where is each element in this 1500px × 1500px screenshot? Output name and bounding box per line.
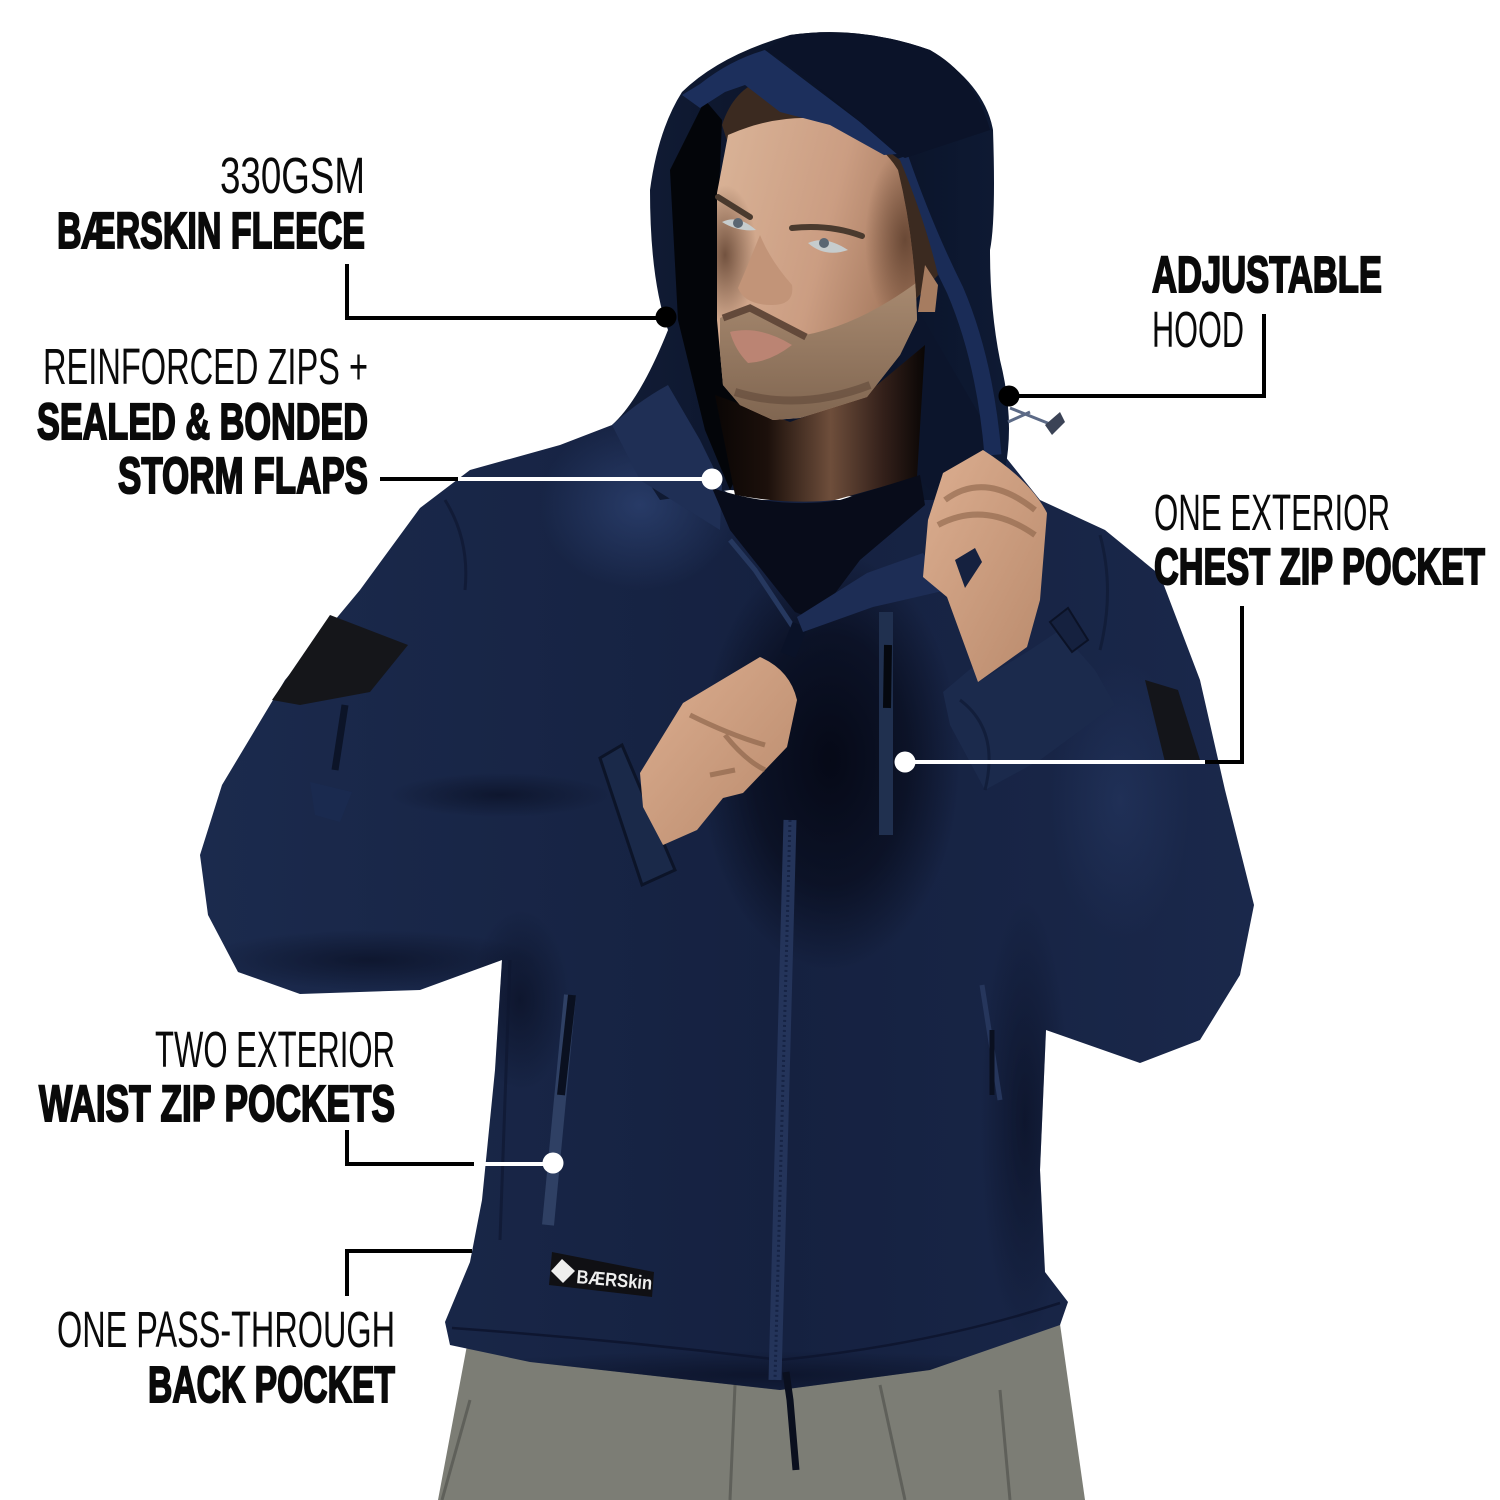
ear (918, 265, 938, 312)
sleeve cuff left (600, 745, 675, 885)
moustache and lips (723, 308, 806, 337)
logo patch (549, 1252, 654, 1297)
callout: adjustable hood: ADJUSTABLE (1152, 246, 1382, 303)
callout: chest zip pocket (894, 484, 1485, 772)
callout: 330gsm baerskin fleece: BÆRSKIN FLEECE (57, 202, 365, 259)
hair (722, 78, 938, 300)
hood peak over forehead (682, 50, 897, 155)
callout: waist zip pockets: TWO EXTERIOR (155, 1021, 395, 1078)
left hand (640, 657, 797, 845)
callout: reinforced zips and storm flaps: STORM FLAPS (118, 447, 368, 504)
bottom hem (452, 1303, 1060, 1360)
callout: reinforced zips and storm flaps (37, 338, 722, 504)
right hand (923, 450, 1047, 682)
callout: 330gsm baerskin fleece (57, 147, 676, 328)
hood toggle (1008, 408, 1065, 435)
main zip (775, 820, 790, 1380)
hem zip pull (786, 1372, 796, 1470)
arm patches (272, 615, 408, 705)
trousers (438, 1310, 1085, 1500)
callout: adjustable hood: HOOD (1152, 301, 1244, 358)
t-shirt (712, 475, 925, 620)
collar zip (730, 540, 795, 630)
eyes and brows (718, 197, 862, 236)
callout: waist zip pockets: WAIST ZIP POCKETS (39, 1075, 395, 1132)
callout: reinforced zips and storm flaps: REINFORCED ZIPS + (43, 338, 368, 395)
jacket body and sleeves (200, 420, 1254, 1470)
sleeve zip (335, 705, 345, 770)
waist pocket zip right (982, 985, 1000, 1100)
collar flap (797, 553, 947, 632)
waist pocket zip left (548, 995, 570, 1225)
nose shadow (738, 235, 792, 305)
photo: man wearing navy fleece hoodie (200, 32, 1254, 1500)
face (715, 118, 938, 420)
beard (720, 280, 920, 425)
callout: pass-through back pocket: BACK POCKET (148, 1356, 395, 1413)
hood (612, 32, 1065, 530)
neck (715, 345, 925, 502)
sleeve cuff right (943, 630, 1115, 790)
callout: waist zip pockets (39, 1021, 564, 1174)
callout: 330gsm baerskin fleece: 330GSM (220, 147, 365, 204)
chest pocket zip (879, 612, 893, 835)
logo patch: BÆRSkin (576, 1267, 653, 1295)
callout: reinforced zips and storm flaps: SEALED & BONDED (37, 393, 368, 450)
callout: adjustable hood (998, 246, 1382, 406)
right hood rim (900, 158, 993, 455)
seams (445, 500, 510, 1240)
callout: pass-through back pocket: ONE PASS-THROUGH (57, 1301, 395, 1358)
callout: pass-through back pocket (57, 1251, 472, 1413)
